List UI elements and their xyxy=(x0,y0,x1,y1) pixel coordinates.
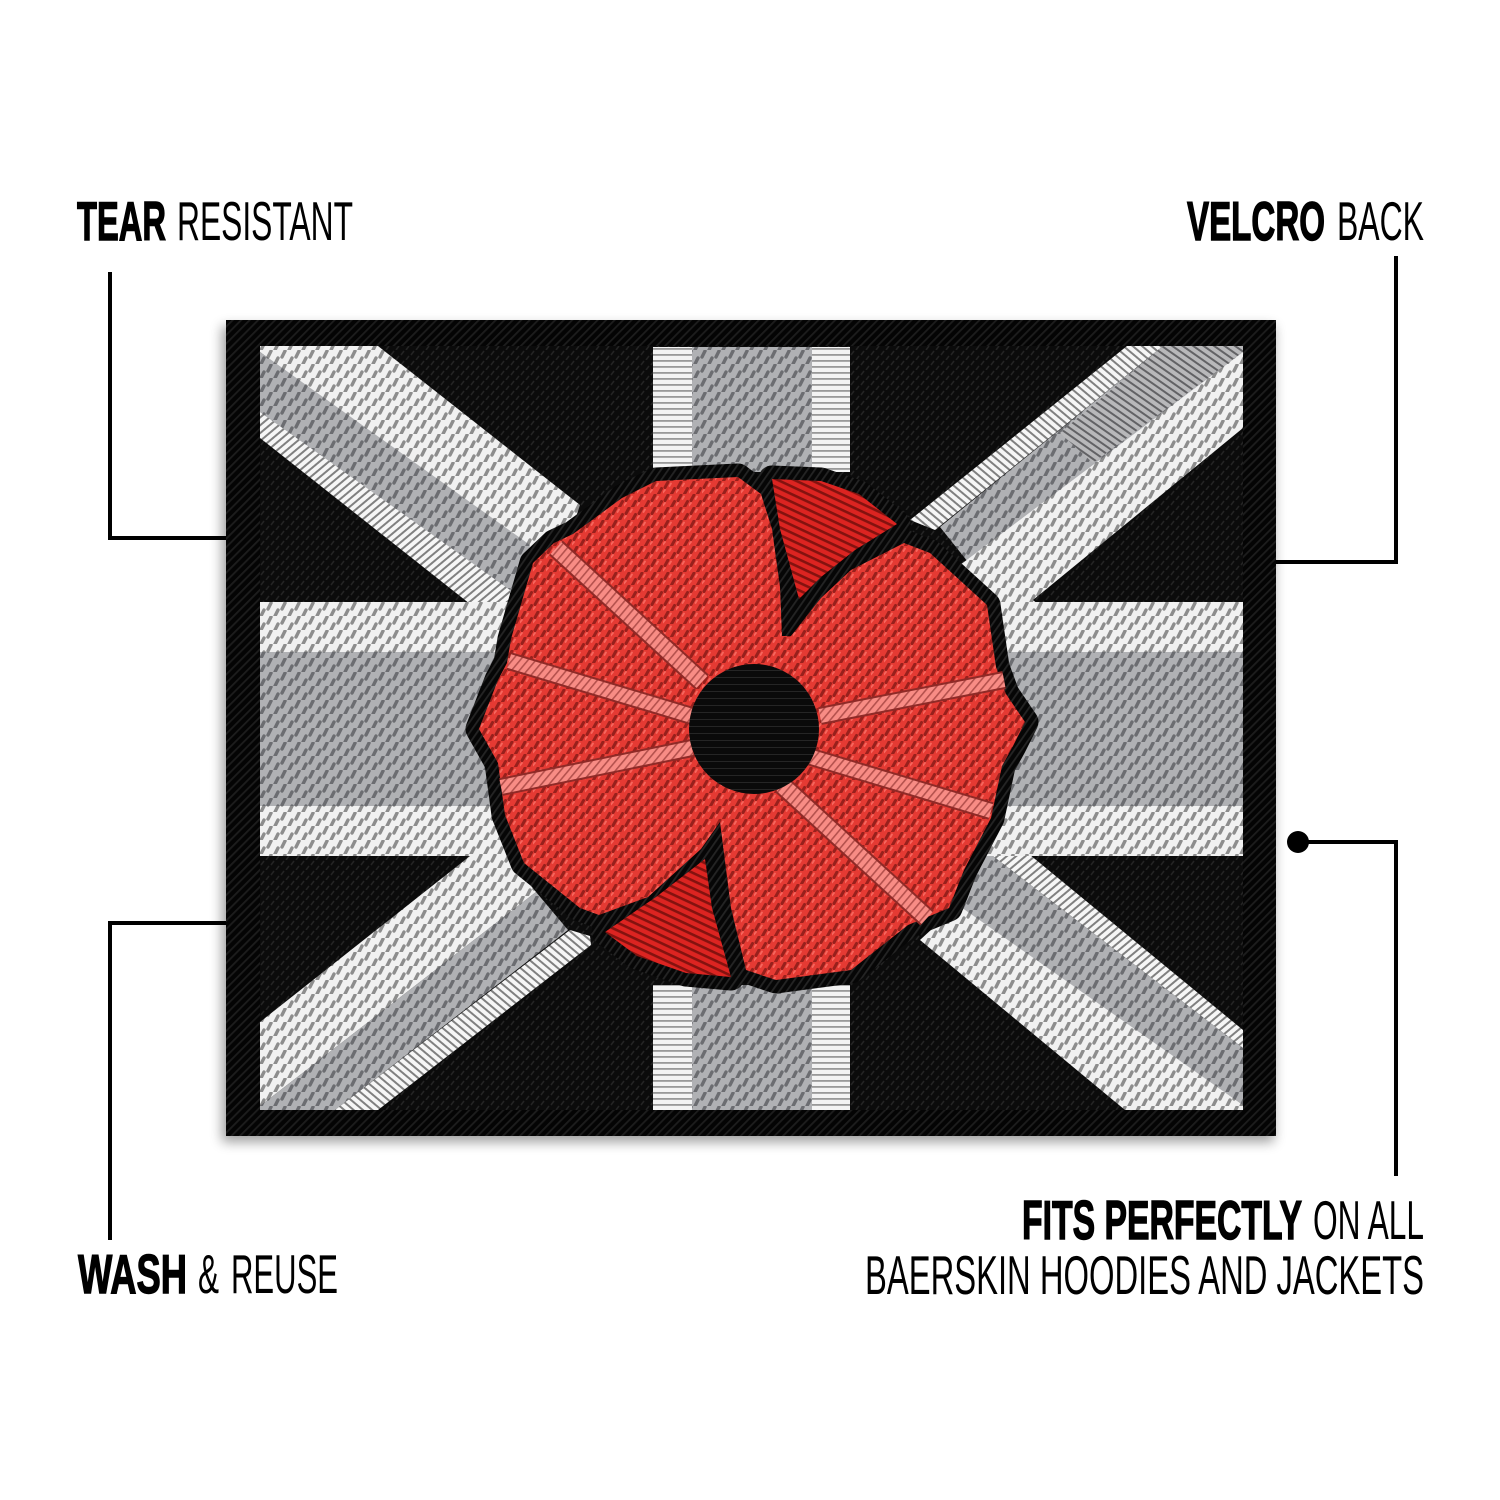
label: ON ALL xyxy=(1313,1189,1424,1251)
flag: top-right diagonal xyxy=(910,346,1243,606)
callout: velcro back xyxy=(1187,190,1424,562)
flag: top vertical bar xyxy=(653,347,850,472)
flag: horizontal cross bar xyxy=(260,602,1243,856)
callout: fits perfectly xyxy=(865,831,1424,1306)
label: REUSE xyxy=(231,1243,338,1305)
label: WASH xyxy=(78,1243,187,1305)
callout: tear resistant xyxy=(77,190,353,538)
flag: bottom vertical bar xyxy=(653,985,850,1110)
leader line xyxy=(1276,256,1396,562)
callout: wash and reuse xyxy=(78,923,338,1305)
label: VELCRO xyxy=(1187,190,1325,252)
label: FITS PERFECTLY xyxy=(1022,1189,1302,1251)
leader dot xyxy=(1287,831,1309,853)
label: BACK xyxy=(1337,190,1424,252)
leader line xyxy=(1298,842,1396,1176)
label xyxy=(77,190,353,252)
leader line xyxy=(110,272,226,538)
rib shadow edges xyxy=(501,548,1004,918)
label xyxy=(78,1243,338,1305)
patch border xyxy=(226,320,1276,1136)
rib stitching xyxy=(501,548,1004,918)
label: RESISTANT xyxy=(177,190,353,252)
label xyxy=(865,1189,1424,1306)
flag: bottom-right diagonal xyxy=(920,850,1243,1110)
dark rear petal, bottom xyxy=(605,859,731,977)
red front petals xyxy=(479,477,1025,980)
label: & xyxy=(198,1243,219,1305)
poppy black outline xyxy=(479,477,1025,980)
poppy centre xyxy=(689,664,819,794)
embroidered patch xyxy=(226,320,1276,1136)
poppy xyxy=(479,477,1025,980)
pink petal ribs xyxy=(501,548,1004,918)
patch shadow xyxy=(222,326,1274,1142)
patch black field xyxy=(260,346,1243,1110)
leader line xyxy=(110,923,226,1240)
label: TEAR xyxy=(77,190,166,252)
dark rear petal, top xyxy=(772,479,897,599)
flag: top-left diagonal xyxy=(260,346,580,604)
flag: bottom-left diagonal xyxy=(260,854,591,1110)
